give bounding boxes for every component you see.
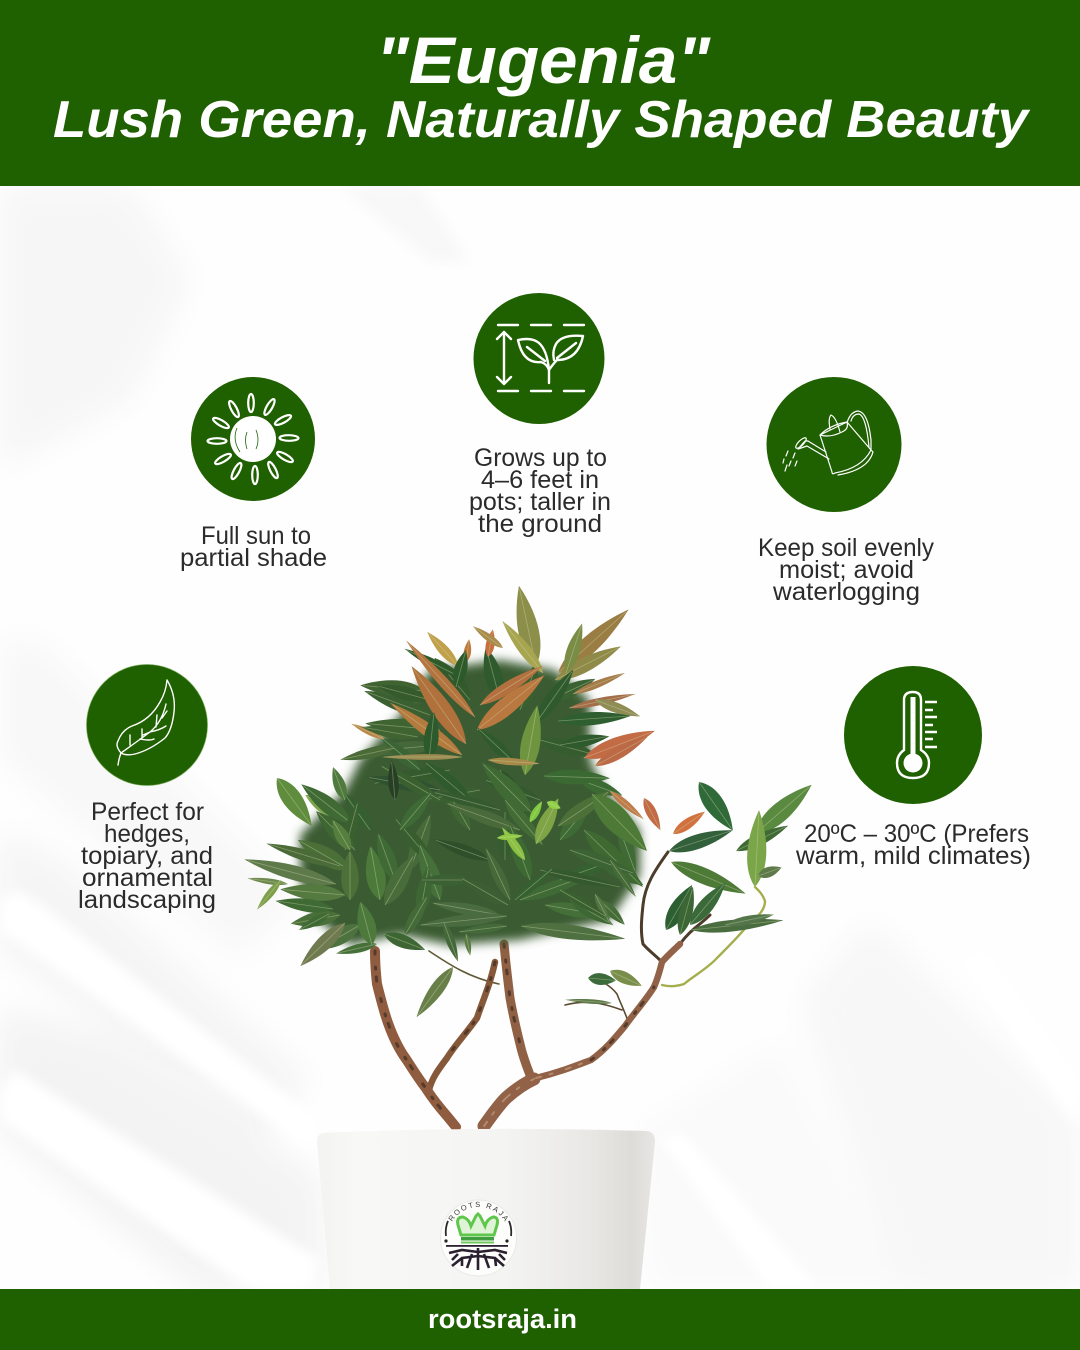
text: uses xyxy=(78,798,216,914)
text: height: the ground xyxy=(478,510,602,538)
text: uses: Perfect for xyxy=(91,798,204,826)
text: watering: Keep soil evenly xyxy=(758,534,934,562)
website: rootsraja.in xyxy=(428,1304,577,1334)
text: height: Grows up to xyxy=(474,444,607,472)
panel: watering xyxy=(758,377,934,606)
footer banner xyxy=(0,1289,1080,1350)
text: uses: landscaping xyxy=(78,886,216,914)
panel: temperature xyxy=(795,666,1031,870)
text: height: pots; taller in xyxy=(469,488,611,516)
icon: height and sprout xyxy=(474,293,604,424)
icon: watering can xyxy=(766,377,902,512)
icon: leaf xyxy=(86,664,208,786)
text: sunlight xyxy=(180,522,327,572)
pot logo: Roots Raja: ROOTS RAJA xyxy=(448,1202,508,1222)
panel: height xyxy=(469,293,611,538)
text: temperature xyxy=(795,820,1031,870)
foliage base layer xyxy=(280,645,647,957)
text: watering: moist; avoid xyxy=(779,556,914,584)
text: watering: waterlogging xyxy=(772,578,920,606)
title banner xyxy=(0,0,1080,186)
text: uses: hedges, xyxy=(104,820,190,848)
text: uses: ornamental xyxy=(82,864,213,892)
text: sunlight: Full sun to xyxy=(201,522,311,550)
foliage top layer xyxy=(242,584,818,1021)
text: temperature: warm, mild climates) xyxy=(795,842,1031,870)
pot logo: Roots Raja xyxy=(440,1200,517,1276)
bark mottling xyxy=(375,944,654,1116)
text: height: 4–6 feet in xyxy=(481,466,599,494)
text: uses: topiary, and xyxy=(81,842,213,870)
pot xyxy=(317,1129,655,1289)
title: "Eugenia" xyxy=(376,23,711,97)
panel: uses xyxy=(78,664,216,914)
text: height xyxy=(469,444,611,538)
dark foliage mass xyxy=(300,660,640,945)
plant: Eugenia in a white pot xyxy=(202,586,855,1289)
text: temperature: 20ºC – 30ºC (Prefers xyxy=(804,820,1029,848)
plant branches xyxy=(375,852,765,1127)
icon: sun xyxy=(191,377,315,501)
text: sunlight: partial shade xyxy=(180,544,327,572)
text: watering xyxy=(758,534,934,606)
icon: thermometer xyxy=(844,666,982,804)
subtitle: Lush Green, Naturally Shaped Beauty xyxy=(53,91,1031,149)
panel: sunlight xyxy=(180,377,327,572)
